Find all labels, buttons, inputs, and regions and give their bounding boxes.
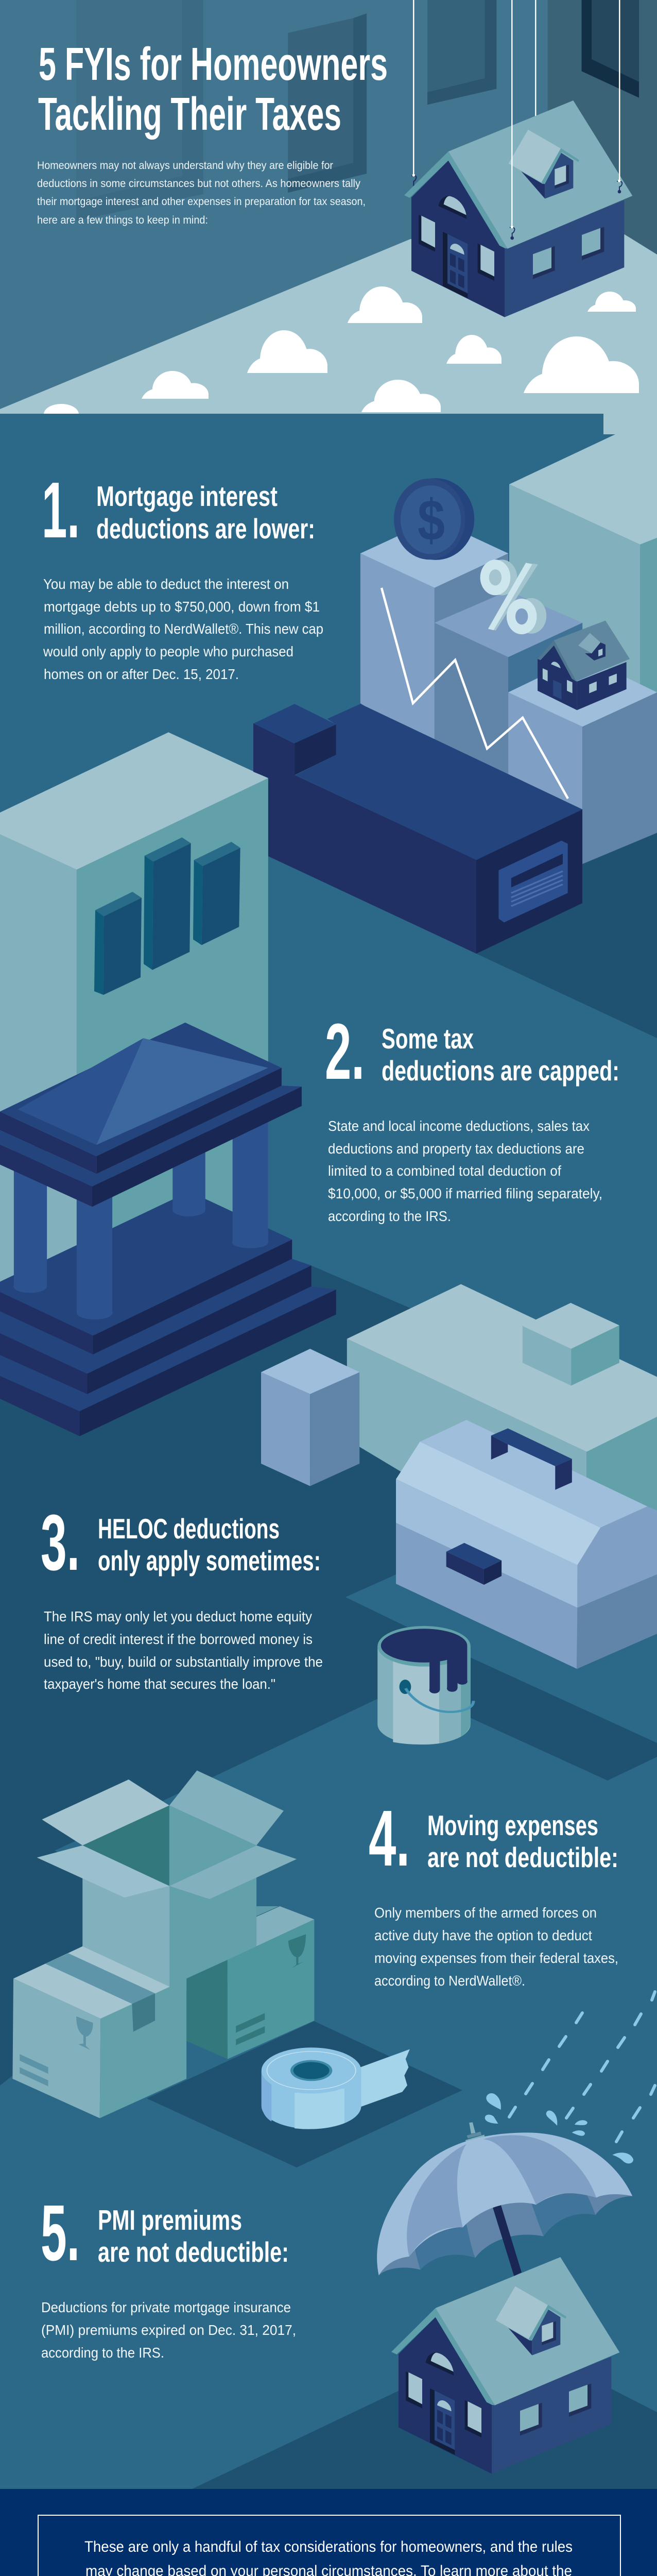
section 2 text: limited to a combined total deduction of (328, 1163, 561, 1179)
hero wall and window panels (76, 0, 657, 279)
section 3 heading: 3. (41, 1498, 80, 1587)
icon: tape roll (262, 2047, 410, 2129)
section 2 text: deductions and property tax deductions are (328, 1141, 584, 1157)
icon: percent (480, 560, 546, 634)
section 4 heading (369, 1794, 618, 1883)
section 2 text (328, 1118, 602, 1224)
section 2 heading (325, 1007, 619, 1096)
icon: open box (37, 1770, 297, 1994)
falling line chart (382, 588, 568, 799)
section 1 text (43, 576, 323, 682)
section 3 text (44, 1608, 323, 1692)
section 2 text: $10,000, or $5,000 if married filing separately, (328, 1185, 602, 1201)
icon: coin: $ (418, 488, 445, 552)
cloud row (44, 286, 639, 425)
section 5 text: according to the IRS. (41, 2345, 164, 2361)
section 4 text: according to NerdWallet®. (374, 1973, 525, 1989)
section 3 text: taxpayer's home that secures the loan." (44, 1676, 275, 1692)
title (38, 39, 388, 140)
icon: stacked boxes (12, 1906, 314, 2118)
section 4 heading: Moving expenses (427, 1809, 598, 1841)
section 1 heading (42, 466, 315, 554)
section 5 heading (41, 2189, 289, 2277)
section 3 text: The IRS may only let you deduct home equity (44, 1608, 312, 1624)
icon: coin (394, 478, 474, 560)
temple icon (0, 1023, 336, 1436)
section 4 text (374, 1905, 618, 1989)
section 1 text: You may be able to deduct the interest on (43, 576, 289, 592)
icon: paint can (377, 1626, 474, 1744)
left hook (411, 176, 416, 187)
section 3 heading: HELOC deductions (98, 1513, 280, 1545)
section 4 heading: 4. (369, 1794, 410, 1883)
section 5 heading: PMI premiums (98, 2204, 242, 2236)
section 4 text: active duty have the option to deduct (374, 1927, 592, 1943)
section 1 text: million, according to NerdWallet®. This new cap (44, 621, 323, 637)
icon: umbrella (377, 2093, 633, 2276)
string behind roof (535, 0, 537, 124)
strings and hooks (412, 0, 622, 240)
section 5 text: Deductions for private mortgage insurance (41, 2299, 291, 2315)
callout text (84, 2538, 573, 2576)
section 3 text: used to, "buy, build or substantially improve the (44, 1654, 323, 1670)
navy block (253, 704, 582, 954)
intro text: deductions in some circumstances but not others. As homeowners tally (37, 178, 360, 190)
section 1 text: would only apply to people who purchased (43, 643, 293, 659)
section 1 text: homes on or after Dec. 15, 2017. (44, 666, 239, 682)
section 2 text: according to the IRS. (328, 1208, 451, 1224)
light slab and cube (347, 1284, 657, 1583)
section 2 text: State and local income deductions, sales tax (328, 1118, 590, 1134)
title: Tackling Their Taxes (38, 89, 341, 140)
section 5 text (41, 2299, 296, 2361)
section 3 text: line of credit interest if the borrowed money is (44, 1631, 313, 1647)
section 2 heading: 2. (325, 1007, 365, 1096)
section 2 heading: Some tax (382, 1023, 474, 1055)
call to action band (0, 2489, 657, 2576)
section 5 heading: 5. (41, 2189, 80, 2277)
top right light block (509, 414, 657, 721)
section 4 text: Only members of the armed forces on (374, 1905, 597, 1921)
intro text (37, 160, 366, 226)
floor bands (0, 773, 657, 2489)
hanging house (404, 100, 632, 317)
intro text: their mortgage interest and other expenses in preparation for tax season, (37, 196, 366, 208)
section 1 heading: deductions are lower: (96, 513, 315, 545)
intro text: Homeowners may not always understand why they are eligible for (37, 160, 333, 172)
tape floor shadow (147, 2021, 462, 2167)
bar chart on block (94, 837, 240, 995)
icon: small house (538, 620, 630, 710)
intro text: here are a few things to keep in mind: (37, 214, 208, 226)
section 3 heading: only apply sometimes: (98, 1545, 321, 1577)
callout text: These are only a handful of tax considerations for homeowners, and the rules (84, 2538, 573, 2555)
title: 5 FYIs for Homeowners (39, 39, 388, 90)
section 4 text: moving expenses from their federal taxes, (374, 1950, 618, 1966)
section 5 text: (PMI) premiums expired on Dec. 31, 2017, (41, 2322, 296, 2338)
section 1 heading: Mortgage interest (96, 480, 278, 512)
house under umbrella (391, 2257, 619, 2474)
hero background (0, 0, 657, 417)
section 5 heading: are not deductible: (98, 2236, 289, 2268)
section 1 pedestals (360, 519, 657, 864)
left light block (0, 732, 268, 1287)
section 1 text: mortgage debts up to $750,000, down from $1 (44, 599, 320, 615)
icon: toolbox (396, 1420, 657, 1669)
section 1 heading: 1. (42, 466, 80, 554)
callout box (38, 2515, 620, 2576)
small blue box (261, 1349, 359, 1486)
section 3 heading (41, 1498, 321, 1587)
light floor (0, 234, 657, 417)
icon: rain (509, 1992, 655, 2142)
